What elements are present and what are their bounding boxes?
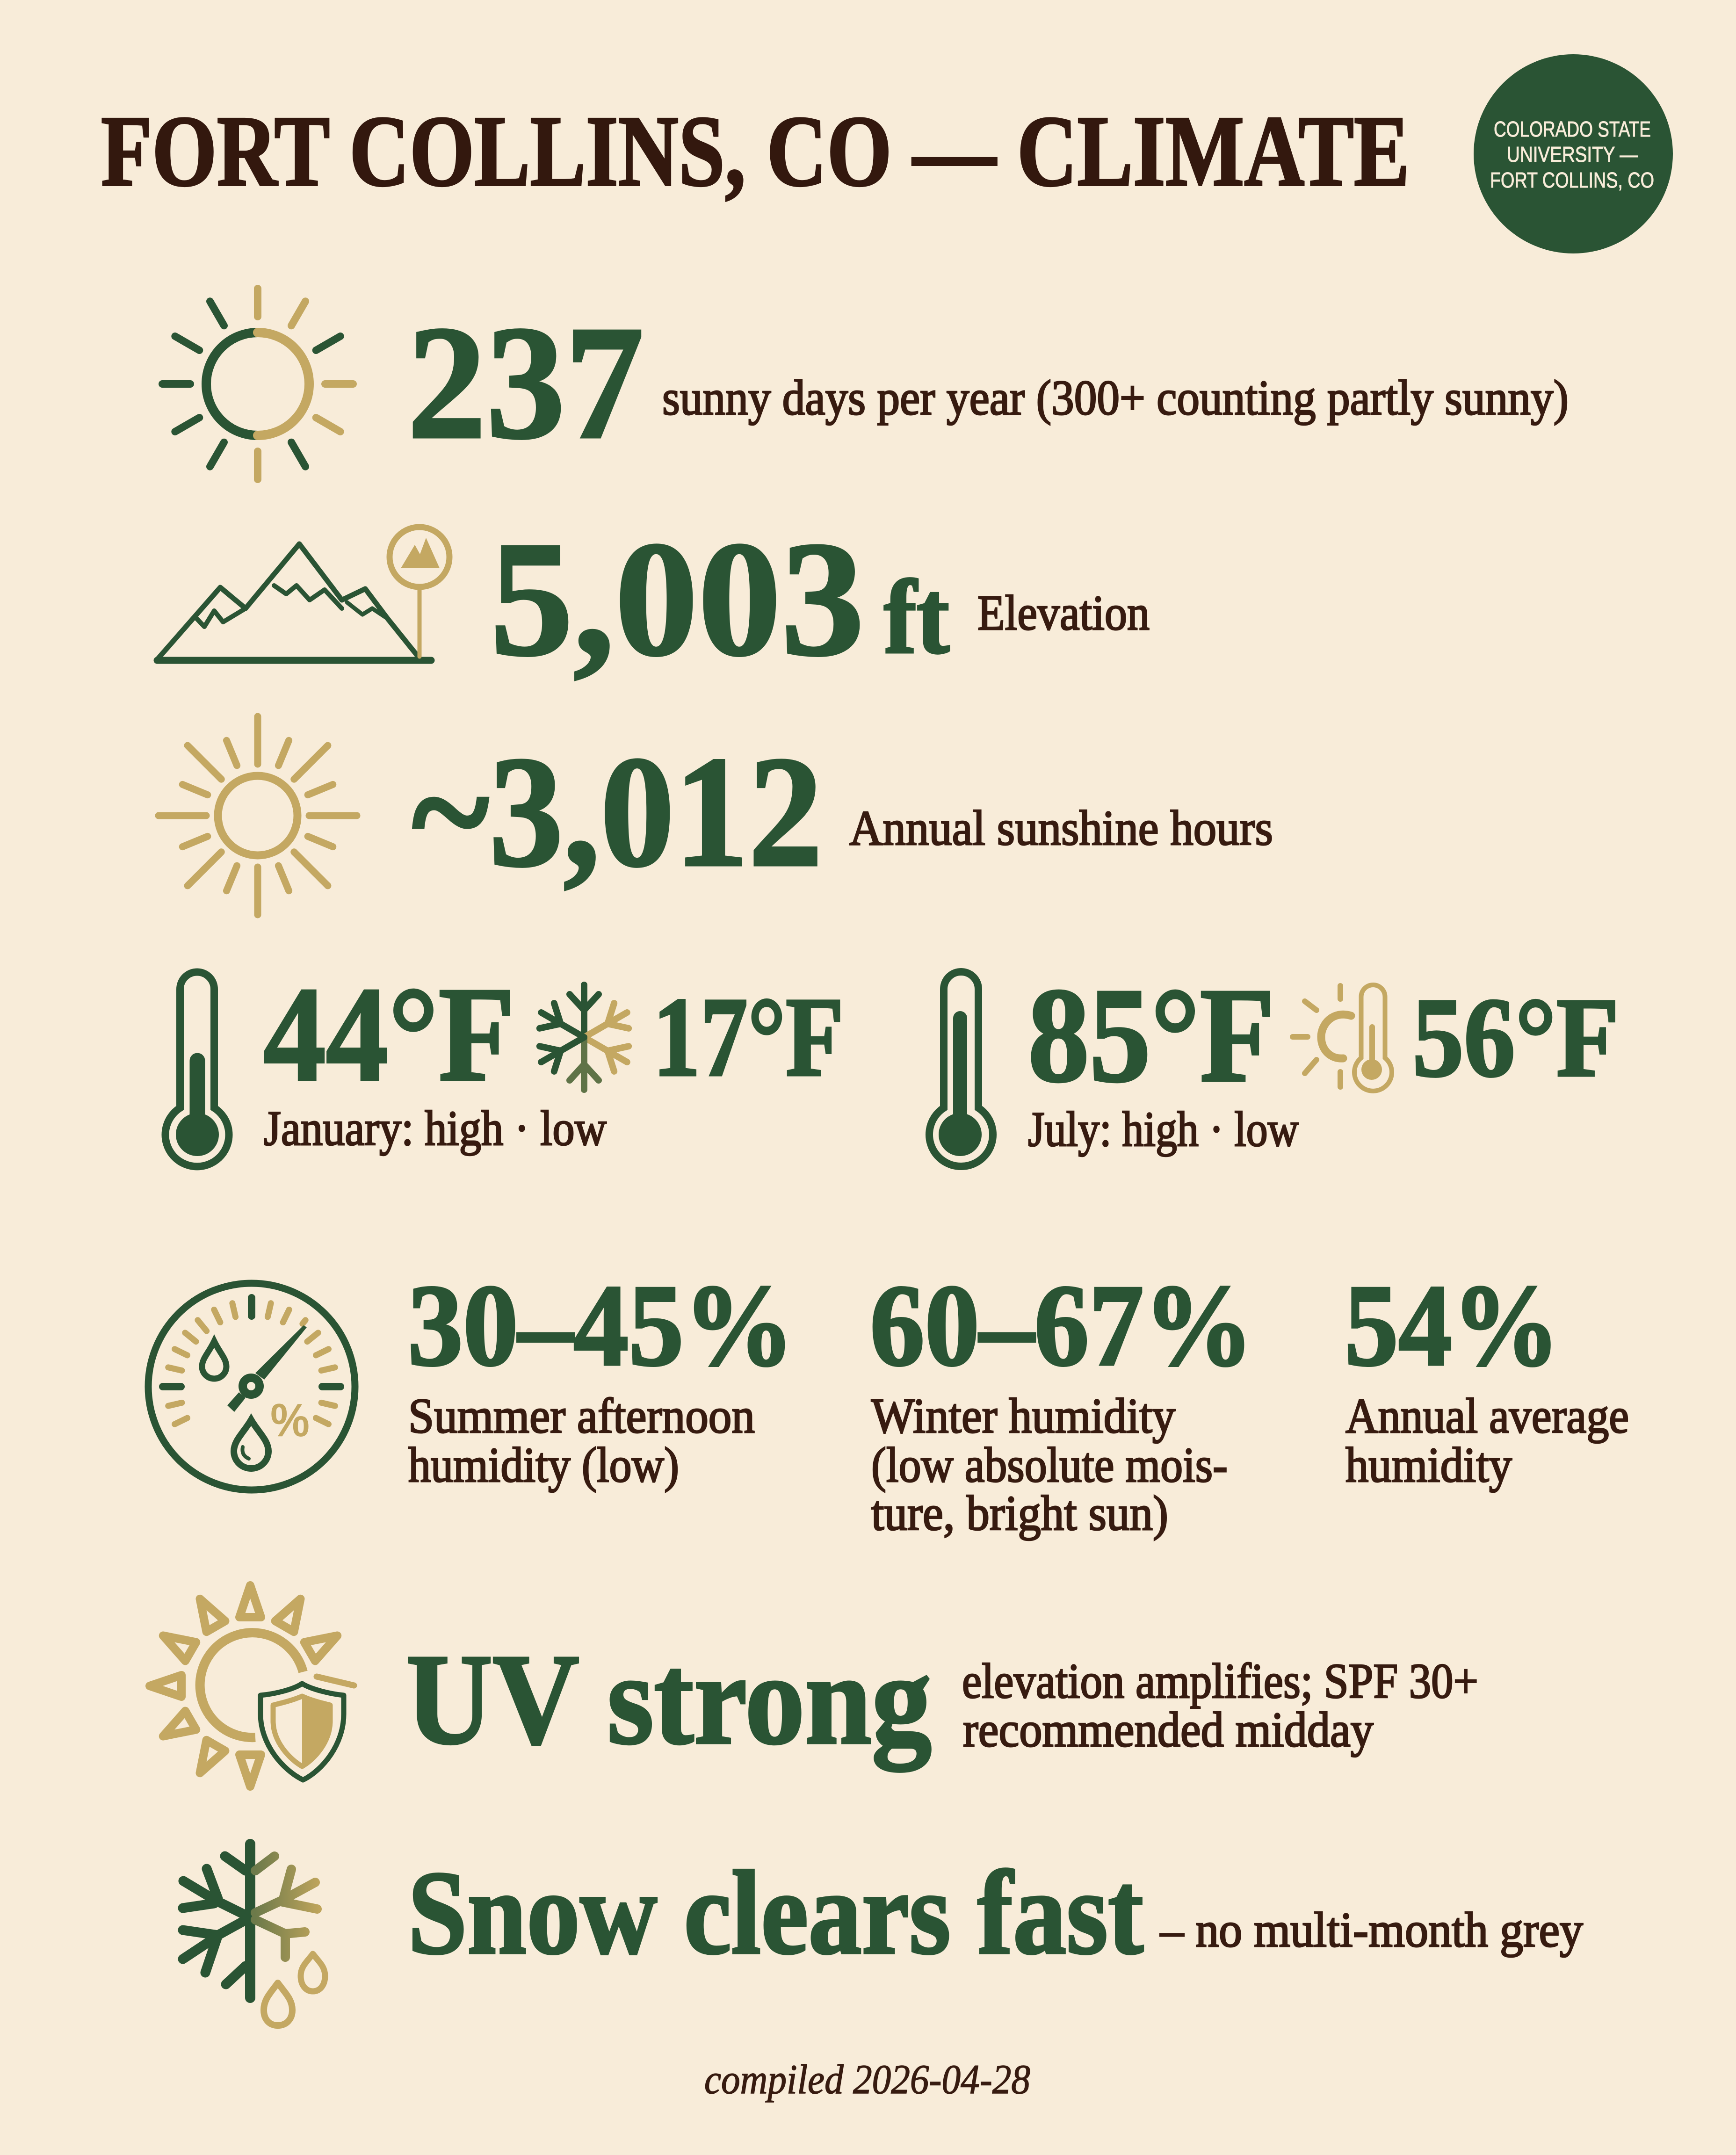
icon: humidity gauge bbox=[148, 1283, 355, 1490]
label: summer humidity: humidity (low) bbox=[408, 1438, 679, 1492]
badge: Colorado State University bbox=[1474, 54, 1673, 253]
icon: melting snowflake bbox=[183, 1844, 325, 2025]
panel: elevation bbox=[157, 508, 1150, 690]
icon: sun and thermometer bbox=[1293, 985, 1392, 1091]
badge: Colorado State University: UNIVERSITY — bbox=[1507, 142, 1638, 166]
panel: sunshine hours bbox=[159, 716, 1273, 915]
label: annual humidity: Annual average bbox=[1345, 1388, 1629, 1443]
stat: 17°F: 17°F bbox=[653, 974, 844, 1100]
panel: July temperatures bbox=[929, 960, 1619, 1166]
icon: thermometer low bbox=[166, 972, 229, 1166]
panel: humidity bbox=[148, 1261, 1629, 1540]
stat: 56°F: 56°F bbox=[1412, 974, 1619, 1100]
label: UV bbox=[962, 1654, 1478, 1757]
stat: ~3,012: ~3,012 bbox=[412, 723, 823, 900]
stat: 85°F: 85°F bbox=[1028, 960, 1275, 1110]
label: snow: – no multi-month grey bbox=[1160, 1902, 1583, 1957]
icon: thermometer high bbox=[929, 972, 993, 1166]
label: July: July: high · low bbox=[1028, 1102, 1299, 1157]
panel: sunny days bbox=[162, 289, 1569, 479]
stat: 60–67%: 60–67% bbox=[870, 1261, 1253, 1390]
icon: snowflake bbox=[534, 985, 634, 1090]
stat: 44°F: 44°F bbox=[263, 959, 515, 1109]
stat: 54%: 54% bbox=[1345, 1261, 1560, 1390]
label: winter humidity: Winter humidity bbox=[871, 1388, 1175, 1443]
stat: 30–45%: 30–45% bbox=[408, 1261, 794, 1390]
label: winter humidity: (low absolute mois- bbox=[871, 1438, 1228, 1492]
stat: 5,003 ft: 5,003 bbox=[490, 508, 864, 690]
icon: sun and shield bbox=[150, 1585, 354, 1786]
label: UV: elevation amplifies; SPF 30+ bbox=[962, 1654, 1478, 1708]
label: winter humidity bbox=[871, 1388, 1228, 1540]
label: summer humidity bbox=[408, 1388, 755, 1492]
stat: snow clears fast: Snow clears fast bbox=[408, 1847, 1143, 1979]
label: UV: recommended midday bbox=[963, 1702, 1374, 1757]
icon: humidity gauge: % bbox=[270, 1394, 310, 1446]
title: FORT COLLINS, CO — CLIMATE bbox=[101, 95, 1410, 207]
label: elevation: Elevation bbox=[977, 586, 1150, 640]
badge: Colorado State University: FORT COLLINS, CO bbox=[1490, 168, 1654, 192]
stat: UV strong: UV strong bbox=[406, 1627, 932, 1773]
label: January: January: high · low bbox=[264, 1101, 607, 1156]
label: sunny days: sunny days per year (300+ counting partly sunny) bbox=[662, 370, 1569, 425]
label: annual humidity: humidity bbox=[1345, 1438, 1512, 1492]
panel: UV bbox=[150, 1585, 1478, 1786]
label: winter humidity: ture, bright sun) bbox=[871, 1486, 1168, 1540]
label: summer humidity: Summer afternoon bbox=[408, 1388, 755, 1443]
label: sunshine hours: Annual sunshine hours bbox=[849, 801, 1273, 855]
footer: compiled date: compiled 2026-04-28 bbox=[704, 2057, 1030, 2103]
icon: mountain with pin bbox=[157, 527, 449, 660]
stat: 237: 237 bbox=[407, 293, 644, 473]
panel: snow bbox=[183, 1844, 1583, 2025]
unit: ft: ft bbox=[884, 558, 949, 675]
label: annual humidity bbox=[1345, 1388, 1629, 1492]
icon: gold sun bbox=[159, 716, 357, 915]
icon: two-tone sun bbox=[162, 289, 353, 479]
badge: Colorado State University: COLORADO STATE bbox=[1494, 117, 1651, 141]
panel: January temperatures bbox=[166, 959, 844, 1166]
